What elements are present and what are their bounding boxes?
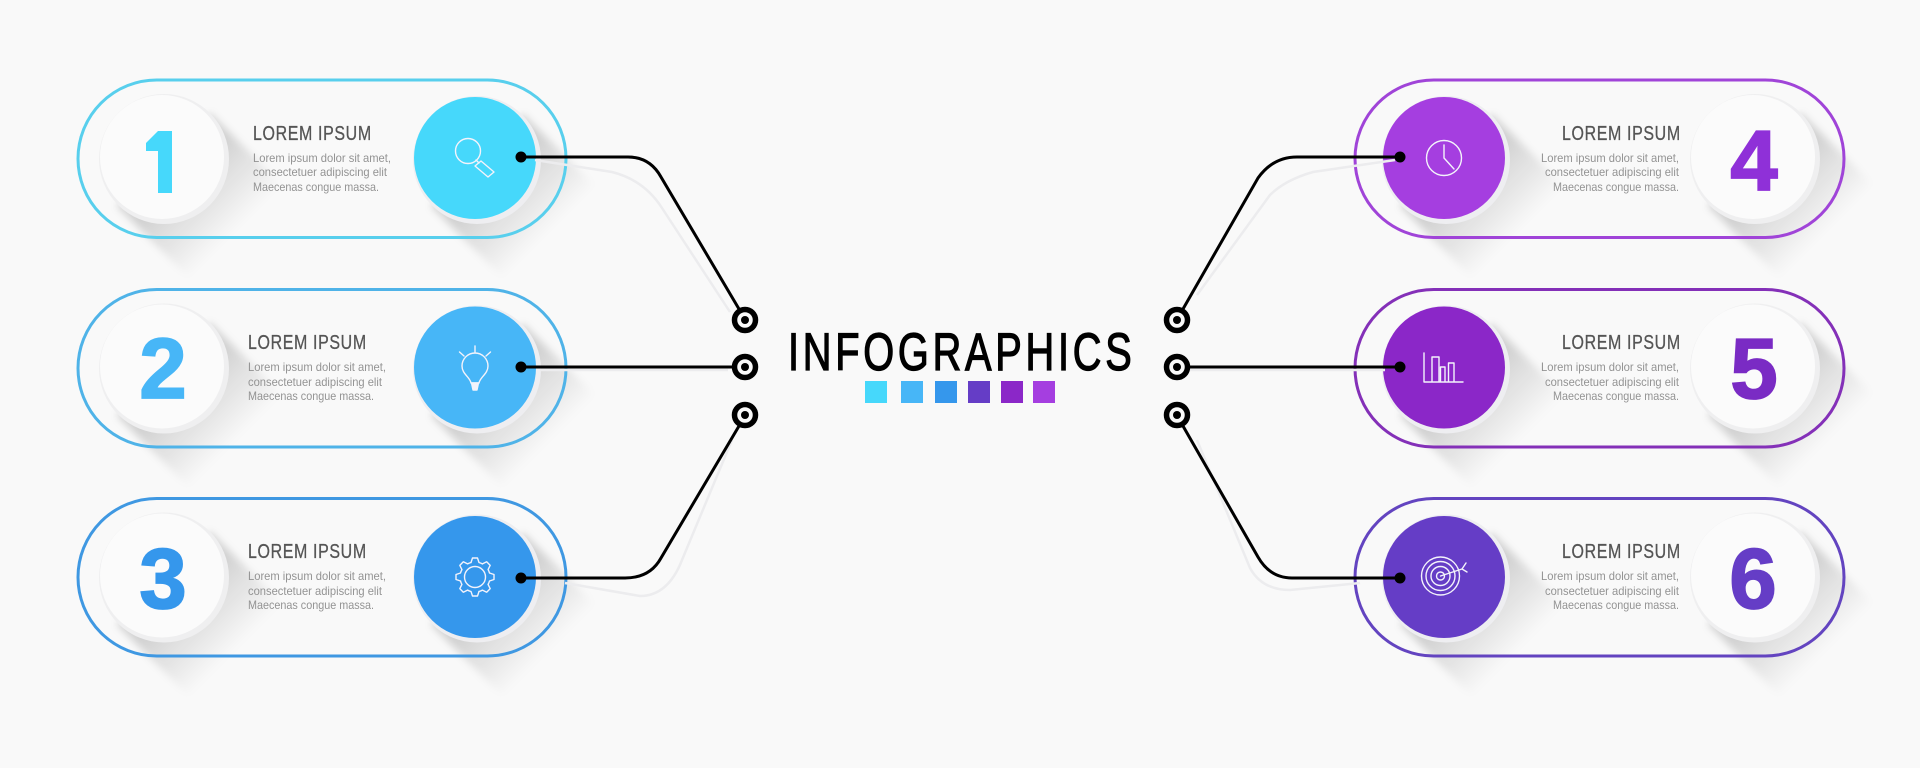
connector rings: right — [1166, 310, 1188, 426]
title: INFOGRAPHICS — [788, 322, 1135, 381]
body text — [248, 570, 386, 612]
body text: Lorem ipsum dolor sit amet, — [248, 570, 386, 583]
icon: colour disc — [414, 306, 536, 428]
connector: step 1 — [516, 152, 739, 309]
body text: Maecenas congue massa. — [248, 599, 374, 612]
number 5: 5 — [1730, 322, 1778, 417]
body text: consectetuer adipiscing elit — [248, 376, 383, 389]
heading: LOREM IPSUM — [253, 121, 372, 144]
icon: bar chart — [1424, 353, 1463, 382]
body text — [253, 152, 391, 194]
icon: colour disc — [1383, 97, 1505, 219]
body text: Lorem ipsum dolor sit amet, — [1541, 152, 1679, 165]
heading: LOREM IPSUM — [248, 330, 367, 353]
panel: step 3 — [78, 498, 598, 700]
heading: LOREM IPSUM — [1562, 330, 1681, 353]
body text: consectetuer adipiscing elit — [248, 585, 383, 598]
icon: gear — [456, 558, 494, 596]
panel: step 2 — [78, 290, 598, 490]
icon: magnifier — [456, 138, 494, 177]
body text: Lorem ipsum dolor sit amet, — [248, 361, 386, 374]
body text: consectetuer adipiscing elit — [1545, 585, 1680, 598]
number 2: 2 — [139, 322, 187, 417]
icon: colour disc — [1383, 306, 1505, 428]
heading: LOREM IPSUM — [248, 539, 367, 562]
body text: consectetuer adipiscing elit — [253, 166, 388, 179]
body text — [1541, 361, 1680, 403]
icon: colour disc — [414, 97, 536, 219]
icon: target — [1422, 557, 1467, 595]
body text — [1541, 570, 1680, 612]
body text — [248, 361, 386, 403]
number 6: 6 — [1729, 532, 1777, 627]
number 4: 4 — [1730, 114, 1778, 209]
body text — [1541, 152, 1680, 194]
body text: Lorem ipsum dolor sit amet, — [1541, 570, 1679, 583]
panel: step 5 — [1355, 290, 1876, 490]
body text: Maecenas congue massa. — [253, 181, 379, 194]
icon: colour disc — [1383, 516, 1505, 638]
connector: step 3 — [516, 426, 739, 584]
number 1 — [146, 131, 172, 193]
heading: LOREM IPSUM — [1562, 121, 1681, 144]
panel: step 6 — [1355, 498, 1876, 700]
number 1: 1 — [140, 117, 188, 212]
connector rings: left — [734, 310, 756, 426]
number 3: 3 — [139, 532, 187, 627]
body text: consectetuer adipiscing elit — [1545, 376, 1680, 389]
body text: Maecenas congue massa. — [1553, 181, 1679, 194]
connector: step 6 — [1183, 426, 1406, 584]
icon: clock — [1426, 140, 1462, 176]
connector: step 4 — [1183, 152, 1406, 309]
body text: Maecenas congue massa. — [248, 390, 374, 403]
icon: light bulb — [460, 346, 490, 390]
colour key squares — [865, 381, 1055, 403]
connector shadows — [535, 160, 1395, 596]
body text: consectetuer adipiscing elit — [1545, 166, 1680, 179]
panel: step 1 — [76, 78, 580, 262]
connector: step 5 — [1190, 362, 1406, 372]
body text: Maecenas congue massa. — [1553, 390, 1679, 403]
icon: colour disc — [414, 516, 536, 638]
body text: Maecenas congue massa. — [1553, 599, 1679, 612]
body text: Lorem ipsum dolor sit amet, — [253, 152, 391, 165]
panel: step 4 — [1355, 80, 1876, 281]
connector: step 2 — [516, 362, 732, 372]
body text: Lorem ipsum dolor sit amet, — [1541, 361, 1679, 374]
heading: LOREM IPSUM — [1562, 539, 1681, 562]
